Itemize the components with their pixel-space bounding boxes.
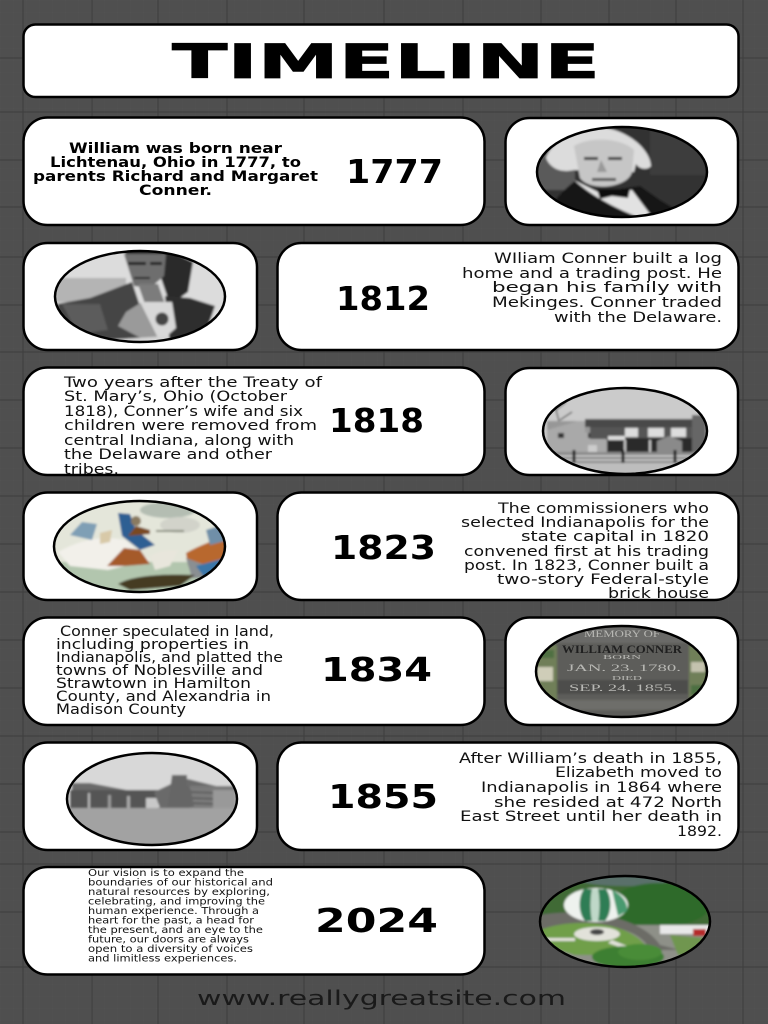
gravestone inscription: WILLIAM CONNER [562, 642, 682, 656]
text block: 1834: County, and Alexandria in [56, 689, 271, 705]
text block: 1834: towns of Noblesville and [56, 663, 263, 679]
text block: 1818: the Delaware and other [64, 447, 272, 463]
text block: 1855: Indianapolis in 1864 where [481, 780, 722, 796]
text block: 1823: two-story Federal-style [497, 572, 709, 588]
text block: 1855: After William’s death in 1855, [459, 751, 722, 767]
text block: 1818: central Indiana, along with [64, 433, 294, 449]
text block: 1812: Mekinges. Conner traded [492, 295, 722, 311]
text block: 1855: East Street until her death in [460, 809, 722, 825]
text block: 1823 [461, 501, 709, 602]
title: TIMELINE [172, 35, 600, 90]
gravestone inscription: DIED [612, 676, 643, 682]
text block: 1823: selected Indianapolis for the [461, 515, 709, 531]
text block: 1812: with the Delaware. [554, 310, 722, 326]
text block: 2024 vision statement: future, our doors are always [88, 934, 249, 946]
text block: 1855: Elizabeth moved to [555, 765, 722, 781]
year 1818: 1818 [329, 401, 424, 440]
year 1812: 1812 [336, 279, 430, 318]
text block: 2024 vision statement: human experience. Through a [88, 906, 259, 917]
panel: 1777 text [24, 118, 484, 225]
text block: 1834: Strawtown in Hamilton [56, 676, 251, 692]
gravestone inscription: JAN. 23. 1780. [567, 663, 681, 673]
text block: 1818: Two years after the Treaty of [63, 375, 323, 391]
panel: 1834 text [24, 618, 484, 725]
text block: 1823: The commissioners who [497, 501, 709, 517]
text block: 1777: William was born near [69, 141, 282, 157]
text block: 1855: she resided at 472 North [494, 795, 722, 811]
footer website: www.reallygreatsite.com [197, 986, 566, 1010]
image: log cabins on a field [65, 750, 240, 847]
text block: 2024 vision statement: celebrating, and improving the [88, 896, 265, 908]
text block: 1855 [459, 751, 722, 840]
panel: log cabin photo [24, 742, 257, 850]
text block: 2024 vision statement: natural resources by exploring, [88, 887, 270, 898]
text block: 1834: Indianapolis, and platted the [56, 650, 283, 666]
text block: 1823: state capital in 1820 [521, 529, 709, 545]
year 1823: 1823 [331, 528, 436, 567]
text block: 2024 vision statement: and limitless experiences. [88, 954, 237, 964]
text block: 2024 vision statement: heart for the past, a head for [88, 916, 255, 926]
text block: 1777: Lichtenau, Ohio in 1777, to [50, 155, 301, 171]
gravestone inscription [562, 629, 682, 693]
text block: 1818 [63, 375, 323, 478]
text block: 1823: convened first at his trading [464, 544, 709, 560]
year 1855: 1855 [328, 777, 438, 816]
text block: 1812: began his family with [492, 280, 722, 296]
year 1777: 1777 [346, 152, 443, 191]
image: two-story historic house [540, 385, 710, 477]
text block: 1823: post. In 1823, Conner built a [464, 558, 709, 574]
text block: 1818: tribes. [64, 462, 119, 478]
panel: portrait of William Conner [506, 118, 738, 225]
image: painted battle scene [53, 500, 228, 594]
image: aerial view with green balloon [538, 874, 712, 970]
text block: 1818: children were removed from [64, 418, 317, 434]
text block: 1812: WIliam Conner built a log [494, 251, 722, 267]
text block: 2024 vision statement: the present, and an eye to the [88, 925, 263, 936]
gravestone inscription: BORN [603, 655, 643, 661]
image: engraved portrait of a Native American leader [54, 250, 226, 345]
text block: 1812 [462, 251, 722, 326]
title panel [24, 24, 738, 97]
text block: 1818: St. Mary’s, Ohio (October [64, 389, 287, 405]
text block: 1834: Conner speculated in land, [60, 624, 274, 640]
panel: 1823 text [278, 492, 738, 602]
text block: 2024 vision statement [88, 868, 273, 964]
text block: 1818: 1818), Conner’s wife and six [64, 404, 303, 420]
text block: 1777: parents Richard and Margaret [33, 169, 318, 185]
panel: 1818 text [24, 368, 484, 478]
panel: 2024 text [24, 867, 484, 974]
text block: 1823: brick house [608, 586, 709, 602]
text block: 1855: 1892. [677, 824, 722, 840]
image: elderly man portrait [535, 125, 710, 220]
text block: 2024 vision statement: boundaries of our historical and [88, 878, 273, 888]
panel: engraved portrait [24, 243, 257, 350]
gravestone inscription: MEMORY OF [584, 629, 660, 639]
text block: 1777: Conner. [139, 183, 212, 199]
text block: 1777 [33, 141, 318, 199]
image: William Conner gravestone [535, 625, 709, 719]
gravestone inscription: SEP. 24. 1855. [569, 683, 677, 693]
panel: house photo [506, 368, 738, 477]
panel: battle painting [24, 492, 257, 600]
text block: 1834: Madison County [56, 702, 186, 718]
text block: 1834: including properties in [56, 637, 249, 653]
text block: 1834 [56, 624, 283, 718]
panel: 1855 text [278, 742, 738, 850]
year 1834: 1834 [321, 650, 432, 689]
text block: 1812: home and a trading post. He [462, 266, 722, 282]
panel: 1812 text [278, 243, 738, 350]
year 2024: 2024 [315, 901, 438, 940]
panel: gravestone photo [506, 618, 738, 725]
text block: 2024 vision statement: open to a diversity of voices [88, 944, 253, 955]
text block: 2024 vision statement: Our vision is to expand the [88, 868, 244, 879]
